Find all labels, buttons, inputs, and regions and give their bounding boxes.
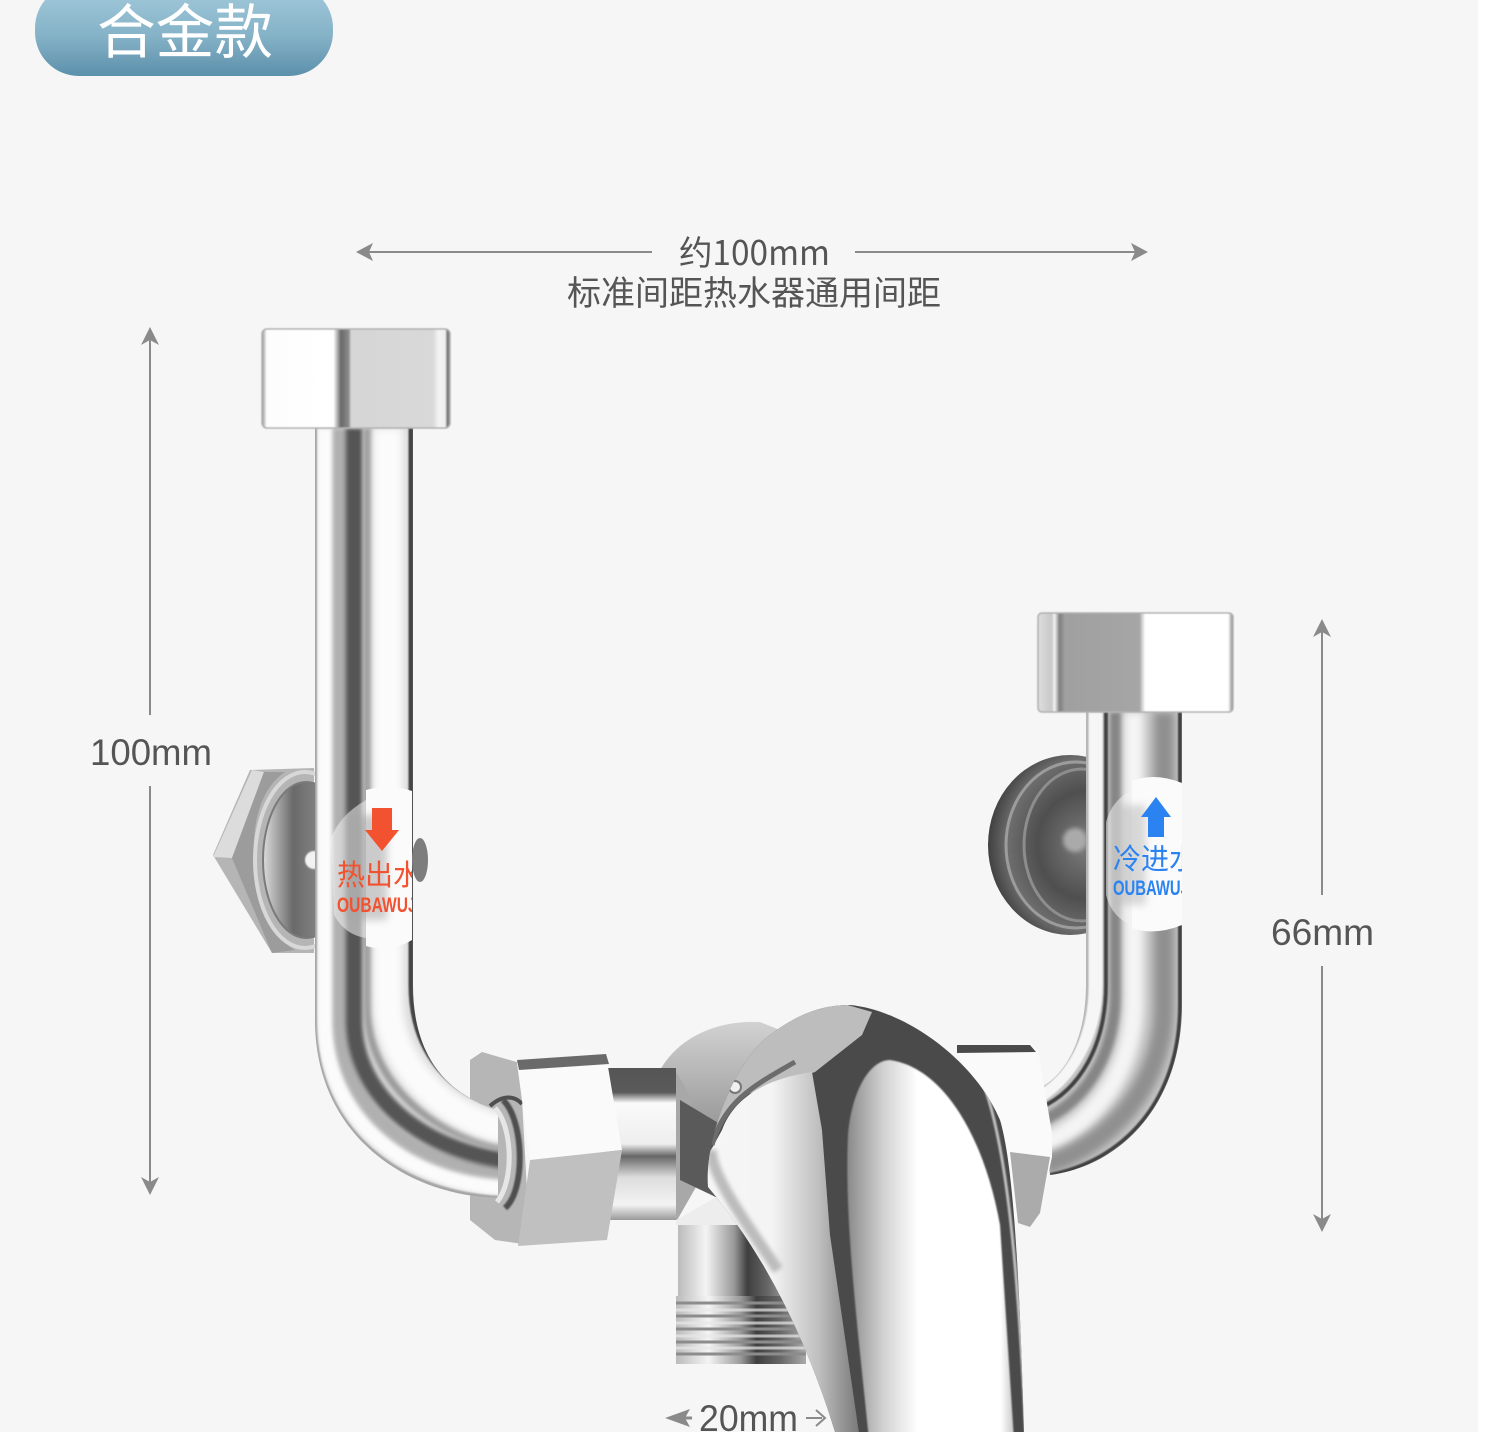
chrome lever handle xyxy=(700,1000,1026,1432)
right pipe xyxy=(1044,712,1182,1175)
bottom width dimension xyxy=(665,1398,825,1432)
left pipe hot water outlet label: 热出水 xyxy=(337,852,421,894)
threaded outlet xyxy=(676,1225,806,1364)
right pipe cold water inlet label: 冷进水 xyxy=(1113,836,1197,878)
top left hex nut xyxy=(262,329,450,428)
top width dimension: 标准间距热水器通用间距 xyxy=(567,266,941,315)
right pipe cold water inlet label: OUBAWUJI xyxy=(1113,877,1193,900)
left pipe hot water outlet label xyxy=(331,787,428,948)
rear dome of valve body xyxy=(660,1022,780,1150)
badge: alloy model xyxy=(35,0,333,76)
left height dimension xyxy=(90,327,212,1195)
top right hex nut xyxy=(1038,613,1233,712)
left pipe hot water outlet label: OUBAWUJI xyxy=(337,894,421,917)
left pipe hex nut with o-ring xyxy=(490,1054,622,1246)
icon: blue up arrow xyxy=(1141,797,1171,837)
left hex nut rear cap xyxy=(470,1052,530,1245)
right pipe hex nut xyxy=(957,1043,1052,1227)
right height dimension: 66mm xyxy=(1271,912,1374,953)
connector between left nut and valve body xyxy=(606,1068,740,1225)
right height dimension xyxy=(1271,619,1374,1232)
top width dimension xyxy=(356,226,1148,315)
top width dimension: 约100mm xyxy=(679,226,830,275)
left pipe xyxy=(315,428,498,1198)
icon: red down arrow xyxy=(365,808,399,851)
left height dimension: 100mm xyxy=(90,732,212,773)
left rear hex nut xyxy=(213,768,355,953)
right pipe cold water inlet label xyxy=(1106,777,1182,932)
right rear rubber washer xyxy=(988,755,1152,935)
